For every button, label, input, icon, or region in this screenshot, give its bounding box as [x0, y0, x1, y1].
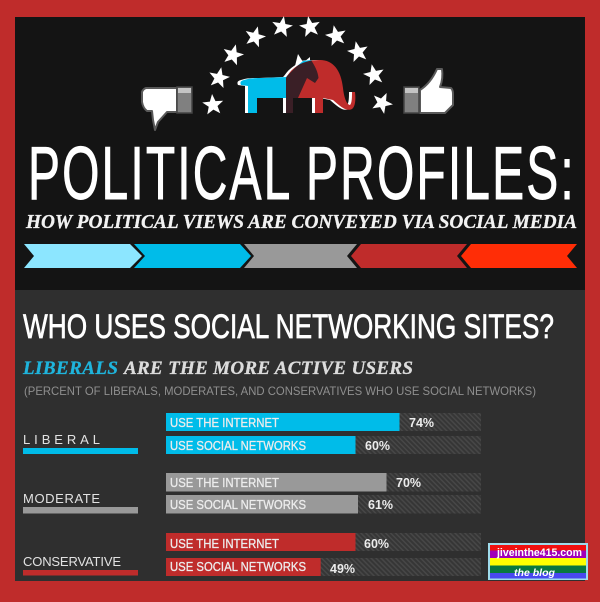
- bar: moderate social: 61%: [368, 498, 393, 512]
- bar: liberal internet: [166, 413, 481, 431]
- group: liberal: [23, 413, 481, 454]
- bar: conservative social: [166, 558, 481, 576]
- panel: header: [15, 14, 585, 290]
- bar: liberal social: 60%: [365, 439, 390, 453]
- subheading remainder: ARE THE MORE ACTIVE USERS: [123, 358, 413, 379]
- bar: conservative social: 49%: [330, 562, 355, 576]
- bar: conservative internet: USE THE INTERNET: [170, 537, 279, 551]
- icon: donkey and elephant: [237, 54, 355, 113]
- bar: conservative internet: 60%: [364, 537, 389, 551]
- icon: thumbs down: [142, 87, 192, 130]
- bar: moderate internet: 70%: [396, 476, 421, 490]
- label: liberal: LIBERAL: [23, 432, 100, 447]
- badge: jiveinthe415: [488, 543, 588, 580]
- bar: liberal internet: 74%: [409, 416, 434, 430]
- panel: who uses social networking sites: [15, 290, 585, 581]
- ribbon: colour spectrum arrows: [24, 244, 577, 268]
- bar: moderate internet: [166, 473, 481, 492]
- bar: moderate social: [166, 495, 481, 514]
- description: (PERCENT OF LIBERALS, MODERATES, AND CONSERVATIVES WHO USE SOCIAL NETWORKS): [24, 384, 536, 398]
- bar: liberal social: [166, 436, 481, 454]
- group: conservative: [23, 533, 481, 576]
- bar: moderate internet: USE THE INTERNET: [170, 476, 279, 490]
- icon: thumbs up: [404, 69, 453, 113]
- bar: conservative social: USE SOCIAL NETWORKS: [170, 560, 306, 574]
- subheading: LIBERALS: [22, 358, 118, 379]
- title: POLITICAL PROFILES:: [28, 132, 576, 216]
- subtitle: HOW POLITICAL VIEWS ARE CONVEYED VIA SOCIAL MEDIA: [25, 211, 577, 233]
- badge: jiveinthe415: jiveinthe415.com: [496, 547, 582, 559]
- label: moderate: MODERATE: [23, 491, 100, 506]
- bar: conservative internet: [166, 533, 481, 551]
- bar: moderate social: USE SOCIAL NETWORKS: [170, 498, 306, 512]
- bar: liberal social: USE SOCIAL NETWORKS: [170, 439, 306, 453]
- group: moderate: [23, 473, 481, 514]
- icon: arc of stars: [202, 14, 396, 116]
- bar: liberal internet: USE THE INTERNET: [170, 416, 279, 430]
- badge: jiveinthe415: the blog: [514, 567, 556, 579]
- label: conservative: CONSERVATIVE: [23, 554, 121, 569]
